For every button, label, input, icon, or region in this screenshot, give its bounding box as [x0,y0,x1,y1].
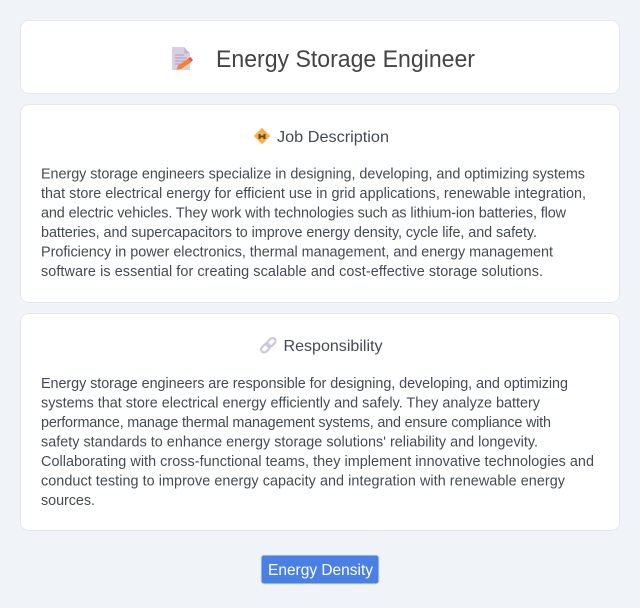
text block: job description: that store electrical energy for efficient use in grid applications, renewable integration, [41,186,586,202]
text block: responsibility: performance, manage thermal management systems, and ensure compliance with [41,415,551,431]
heading: responsibility: Responsibility [284,338,382,355]
text block: job description: software is essential for creating scalable and cost-effective storage solutions. [41,264,543,280]
text block: responsibility: sources. [41,493,95,509]
text block: responsibility: Energy storage engineers are responsible for designing, developing, and optimizing [41,376,568,392]
panel: title card [20,20,620,94]
icon: diamond sign [254,128,270,144]
tag: energy density [261,555,379,584]
text block: responsibility: Collaborating with cross-functional teams, they implement innovative technologies and [41,454,594,470]
text block: job description: batteries, and supercapacitors to improve energy density, cycle life, and safety. [41,225,537,241]
panel: responsibility [20,314,620,530]
title: Energy Storage Engineer [216,46,475,73]
text block: job description: and electric vehicles. They work with technologies such as lithium-ion batteries, flow [41,206,567,222]
text block: responsibility: systems that store electrical energy efficiently and safely. They analyze battery [41,396,541,412]
text block: responsibility [41,376,594,509]
text block: job description: Proficiency in power electronics, thermal management, and energy management [41,244,553,260]
text block: responsibility: conduct testing to improve energy capacity and integration with renewable energy [41,474,566,490]
heading: job description: Job Description [277,129,389,146]
panel: job description [20,104,620,302]
text block: job description: Energy storage engineers specialize in designing, developing, and optimizing systems [41,166,585,182]
icon: document with pencil [172,47,193,70]
icon: chain link [260,337,277,354]
text block: responsibility: safety standards to enhance energy storage solutions' reliability and longevity. [41,434,538,450]
text block: job description [41,166,586,280]
tag: energy density: Energy Density [268,562,373,579]
